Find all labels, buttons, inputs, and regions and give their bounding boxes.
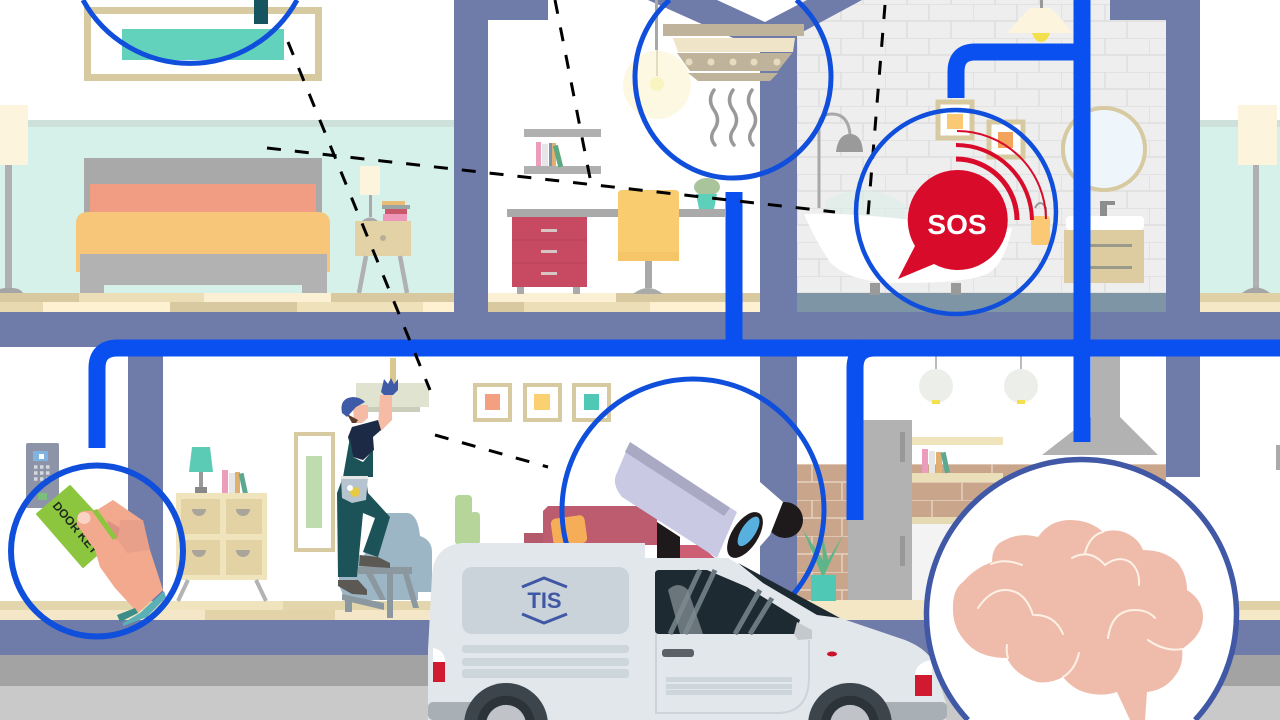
signal arcs bbox=[956, 131, 1046, 220]
keypad bbox=[26, 443, 59, 508]
camera housing bbox=[714, 482, 783, 562]
cargo panel bbox=[462, 567, 629, 634]
cactus bbox=[694, 178, 720, 209]
side window bbox=[655, 570, 800, 634]
key card: DOOR KEY bbox=[50, 499, 102, 557]
dashed connector lines bbox=[267, 0, 885, 467]
room: study bbox=[488, 129, 760, 312]
stool bbox=[342, 567, 419, 618]
van bbox=[428, 543, 947, 720]
TIS logo bbox=[522, 578, 567, 623]
TIS logo: TIS bbox=[527, 588, 562, 613]
pictures bbox=[938, 102, 1023, 157]
mirror bbox=[1063, 108, 1145, 190]
heater fixture bbox=[663, 24, 804, 81]
forearm bbox=[378, 395, 392, 431]
room: bedroom bbox=[0, 0, 454, 312]
sofa bbox=[524, 506, 716, 559]
callout: ceiling heater circle bbox=[623, 0, 831, 178]
bumper bbox=[428, 702, 947, 720]
room: bathroom bbox=[797, 0, 1166, 312]
camera mount bbox=[657, 522, 680, 560]
room: right edge bedroom bbox=[1200, 105, 1280, 312]
key card bbox=[37, 486, 117, 567]
callout: SOS circle bbox=[856, 110, 1056, 314]
room: living room bbox=[0, 358, 716, 620]
towel bbox=[1031, 203, 1050, 245]
plant bbox=[803, 528, 843, 601]
chair bbox=[618, 190, 679, 294]
heat waves bbox=[710, 90, 756, 145]
callout: brain circle bbox=[926, 460, 1236, 720]
gloves bbox=[381, 378, 398, 395]
bed bbox=[76, 158, 330, 293]
pendant glow bbox=[623, 0, 691, 119]
desk bbox=[507, 209, 725, 294]
armchair bbox=[339, 513, 432, 600]
SOS label: SOS bbox=[927, 209, 987, 240]
room: kitchen bbox=[797, 356, 1280, 620]
worker on stool bbox=[337, 378, 419, 618]
callout: CCTV camera circle bbox=[562, 379, 824, 641]
range hood bbox=[1042, 356, 1158, 455]
windshield bbox=[738, 563, 840, 618]
brain bbox=[953, 520, 1203, 720]
floor lamp left bbox=[0, 105, 28, 293]
hand bbox=[77, 500, 166, 626]
wall picture bbox=[88, 0, 318, 78]
bookshelf bbox=[524, 129, 601, 174]
boots bbox=[338, 555, 390, 595]
torso bbox=[348, 420, 381, 460]
bedroom floor tiles bbox=[0, 293, 454, 312]
cactus bbox=[455, 495, 480, 545]
air conditioner bbox=[356, 358, 429, 412]
ceiling lamp bbox=[1007, 0, 1072, 42]
camera knob bbox=[767, 502, 803, 538]
tall picture bbox=[296, 434, 333, 550]
camera lens bbox=[720, 506, 770, 564]
panel stripes bbox=[462, 645, 629, 678]
head bbox=[341, 397, 368, 423]
front light bbox=[915, 660, 932, 696]
van body bbox=[428, 543, 946, 720]
callout: top-left circle bbox=[83, 0, 297, 63]
vanity bbox=[1064, 201, 1144, 283]
trousers bbox=[337, 477, 390, 577]
bathtub bbox=[804, 190, 1012, 295]
fridge bbox=[848, 420, 912, 600]
overall bib bbox=[343, 437, 373, 477]
pendant lights bbox=[919, 356, 1038, 404]
study floor tiles bbox=[488, 293, 760, 312]
front wheel bbox=[808, 683, 892, 720]
rear light bbox=[433, 648, 445, 682]
shower bbox=[819, 114, 863, 208]
rear wheel bbox=[464, 683, 548, 720]
tool belt bbox=[341, 476, 368, 503]
callout: door key circle bbox=[11, 466, 183, 636]
speech bubble bbox=[898, 170, 1008, 279]
blue pipes bbox=[97, 0, 1280, 520]
nightstand with lamp bbox=[355, 166, 411, 293]
cabinet with lamp and books bbox=[176, 447, 267, 601]
wing mirror bbox=[794, 622, 812, 640]
oven bbox=[912, 524, 962, 600]
living room floor tiles bbox=[0, 601, 440, 620]
three pictures bbox=[475, 385, 609, 420]
camera body bbox=[615, 442, 737, 558]
door bbox=[656, 634, 837, 713]
shelves bbox=[912, 437, 1003, 482]
